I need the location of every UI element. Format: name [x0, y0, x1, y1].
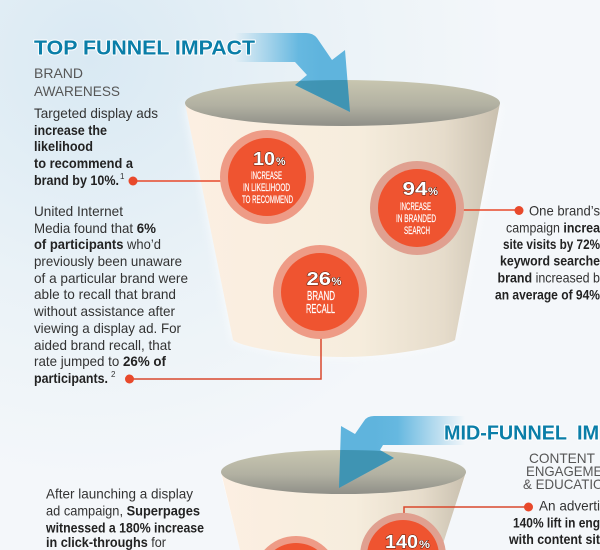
arrow: into top funnel [235, 33, 350, 112]
text block: superpages: ad campaign, Superpages [46, 504, 200, 518]
stat circle: 26 percent: RECALL [306, 302, 335, 316]
stat circle: 94 percent: 94 [402, 178, 428, 199]
text block: superpages: witnessed a 180% increase [45, 520, 204, 536]
stat circle: 94 percent: % [428, 186, 438, 198]
text block: united internet media: rate jumped to 26% of [34, 354, 166, 369]
stat circle: 10 percent: IN LIKELIHOOD [243, 182, 290, 194]
stat circle: 26 percent [273, 245, 367, 339]
text block: united internet media [33, 204, 188, 386]
text block: united internet media: previously been unaware [34, 254, 182, 269]
stat circle: 94 percent [370, 161, 464, 255]
text block: targeted display ads: likelihood [34, 139, 93, 154]
stat circle: 10 percent: 10 [253, 148, 275, 169]
text block: united internet media: Media found that 6% [34, 221, 156, 236]
text block: targeted display ads: 1 [120, 172, 125, 181]
funnel: mid funnel [221, 450, 466, 550]
subheading: brand awareness [34, 66, 120, 99]
stat circle: 10 percent: INCREASE [251, 170, 282, 182]
connector: 26 percent [125, 335, 321, 384]
text block: united internet media: participants. [34, 371, 108, 386]
text block: targeted display ads: Targeted display ads [34, 106, 158, 121]
text block: superpages [45, 486, 204, 550]
stat circle: 94 percent: SEARCH [404, 225, 430, 237]
text block: an advertiser [508, 498, 600, 547]
text block: an advertiser: An adverti [539, 498, 600, 514]
text block: united internet media: without assistance after [33, 304, 175, 319]
arrow: into mid funnel [339, 416, 465, 488]
text block: united internet media: of a particular brand were [34, 271, 188, 286]
subheading: brand awareness: AWARENESS [34, 84, 120, 99]
connector: 10 percent [128, 176, 230, 186]
stat circle: 26 percent: % [332, 276, 342, 288]
stat circle: 94 percent: IN BRANDED [396, 213, 436, 225]
text block: targeted display ads: brand by 10%. [34, 173, 119, 188]
title: mid-funnel impact: IM [577, 422, 599, 444]
stat circle: 94 percent: INCREASE [400, 201, 431, 213]
stat circle: 10 percent: % [276, 156, 286, 168]
text block: one brand's campaign [495, 204, 600, 302]
title: top funnel impact: TOP FUNNEL IMPACT [34, 38, 255, 60]
text block: united internet media: viewing a display ad. For [34, 321, 181, 336]
stat circle: 140 percent [360, 513, 446, 550]
title: mid-funnel impact: MID-FUNNEL [444, 422, 567, 444]
funnel: top funnel [185, 80, 500, 357]
text block: targeted display ads: to recommend a [34, 156, 133, 171]
text block: united internet media: aided brand recall, that [34, 338, 171, 353]
text block: superpages: After launching a display [46, 486, 193, 502]
connector: 94 percent [455, 206, 524, 215]
text block: united internet media: United Internet [34, 204, 123, 219]
text block: targeted display ads: increase the [34, 123, 107, 138]
subheading: content engagement and education: CONTENT [529, 451, 595, 466]
text block: united internet media: able to recall that brand [34, 287, 176, 302]
stat circle: 26 percent: BRAND [307, 289, 335, 303]
stat circle: 180 percent partial [264, 536, 328, 550]
text block: united internet media: 2 [111, 370, 116, 379]
text block: superpages: in click-throughs for [46, 535, 166, 550]
stat circle: 26 percent: 26 [306, 268, 331, 289]
stat circle: 10 percent: TO RECOMMEND [242, 194, 293, 206]
subheading: content engagement and education [523, 451, 600, 492]
text block: united internet media: of participants who’d [34, 237, 161, 252]
stat circle: 10 percent [220, 130, 314, 224]
subheading: brand awareness: BRAND [34, 66, 83, 81]
text block: targeted display ads [34, 106, 158, 188]
connector: 140 percent [404, 502, 533, 515]
